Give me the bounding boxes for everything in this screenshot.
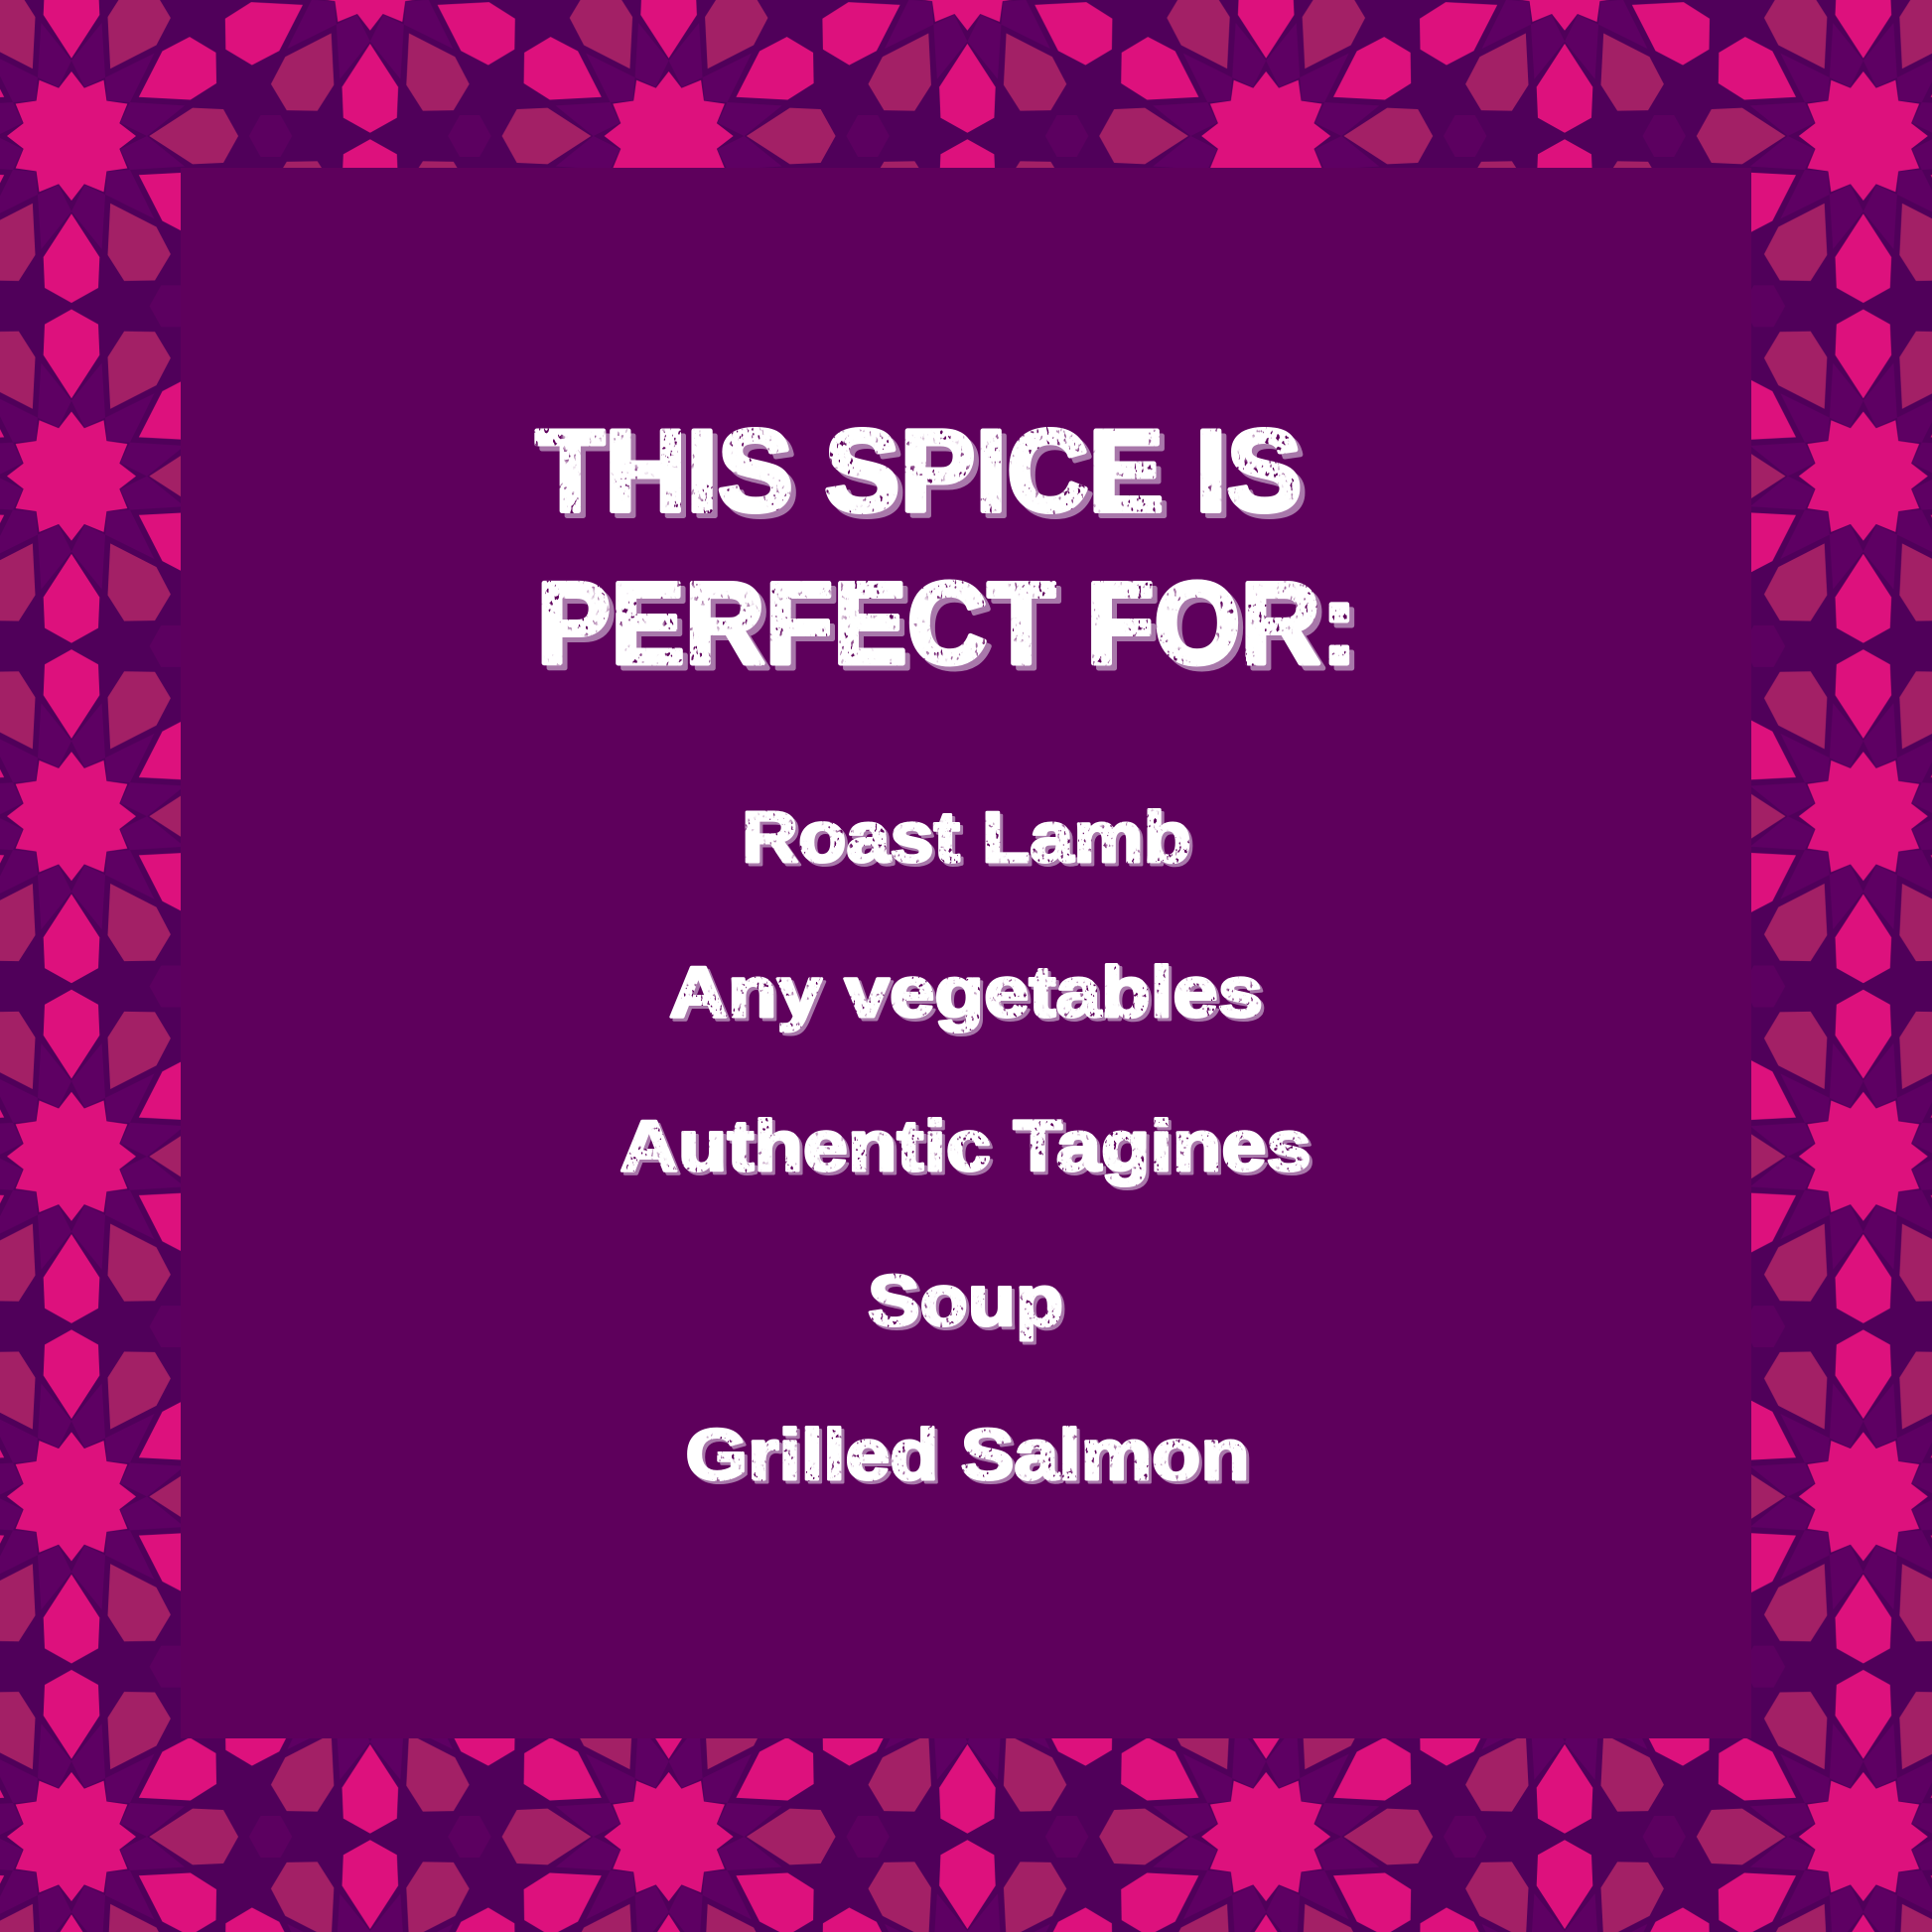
- title: [536, 405, 1358, 688]
- title: PERFECT FOR:: [536, 558, 1358, 688]
- list of dishes: [620, 798, 1311, 1495]
- list of dishes: Any vegetables: [669, 953, 1263, 1033]
- list of dishes: Grilled Salmon: [685, 1416, 1249, 1495]
- title: THIS SPICE IS: [536, 405, 1303, 536]
- panel: central purple square: [181, 168, 1751, 1738]
- list of dishes: Roast Lamb: [742, 798, 1191, 878]
- list of dishes: Soup: [868, 1262, 1063, 1341]
- list of dishes: Authentic Tagines: [620, 1107, 1311, 1186]
